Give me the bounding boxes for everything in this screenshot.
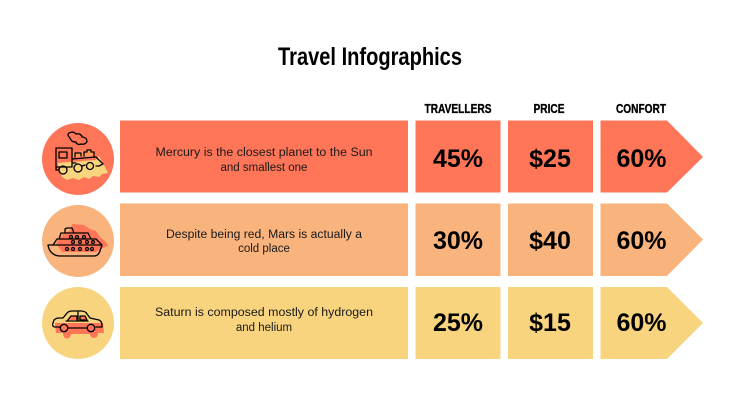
arrow cell: comfort: 60% <box>616 227 667 255</box>
heading: travellers: TRAVELLERS <box>424 101 492 116</box>
column headings <box>424 101 666 116</box>
panel: description <box>120 204 408 276</box>
row 1: train: and smallest one <box>221 162 307 174</box>
cell: price: $15 <box>529 309 571 337</box>
row 3: car <box>42 287 703 359</box>
row 3: car: and helium <box>236 322 292 334</box>
text: description: Mercury is the closest planet to the Sun <box>156 147 372 159</box>
cell: travellers <box>416 287 500 359</box>
arrow cell: comfort <box>600 204 703 276</box>
cell: travellers <box>416 204 500 276</box>
row 2: ship: cold place <box>238 243 290 255</box>
icon: train <box>42 123 114 195</box>
panel: description <box>120 287 408 359</box>
cell: price <box>508 120 593 192</box>
cell: travellers <box>416 120 500 192</box>
panel: description <box>120 120 408 192</box>
arrow cell: comfort: 60% <box>616 309 667 337</box>
cell: price: $40 <box>529 227 571 255</box>
cell: travellers: 45% <box>433 145 483 173</box>
text: description: Despite being red, Mars is actually a <box>166 229 363 241</box>
icon: ship <box>42 205 114 277</box>
text: description: Saturn is composed mostly of hydrogen <box>155 307 373 319</box>
cell: price <box>508 287 593 359</box>
cell: price: $25 <box>529 145 571 173</box>
arrow cell: comfort <box>600 287 703 359</box>
arrow cell: comfort: 60% <box>616 145 667 173</box>
cell: price <box>508 204 593 276</box>
cell: travellers: 30% <box>433 227 483 255</box>
icon: car <box>42 287 114 359</box>
heading: comfort: CONFORT <box>616 101 666 116</box>
arrow cell: comfort <box>600 120 703 192</box>
title: Travel Infographics <box>278 43 462 71</box>
row 2: ship <box>42 204 703 277</box>
heading: price: PRICE <box>534 101 565 116</box>
cell: travellers: 25% <box>433 309 483 337</box>
row 1: train <box>42 120 703 195</box>
